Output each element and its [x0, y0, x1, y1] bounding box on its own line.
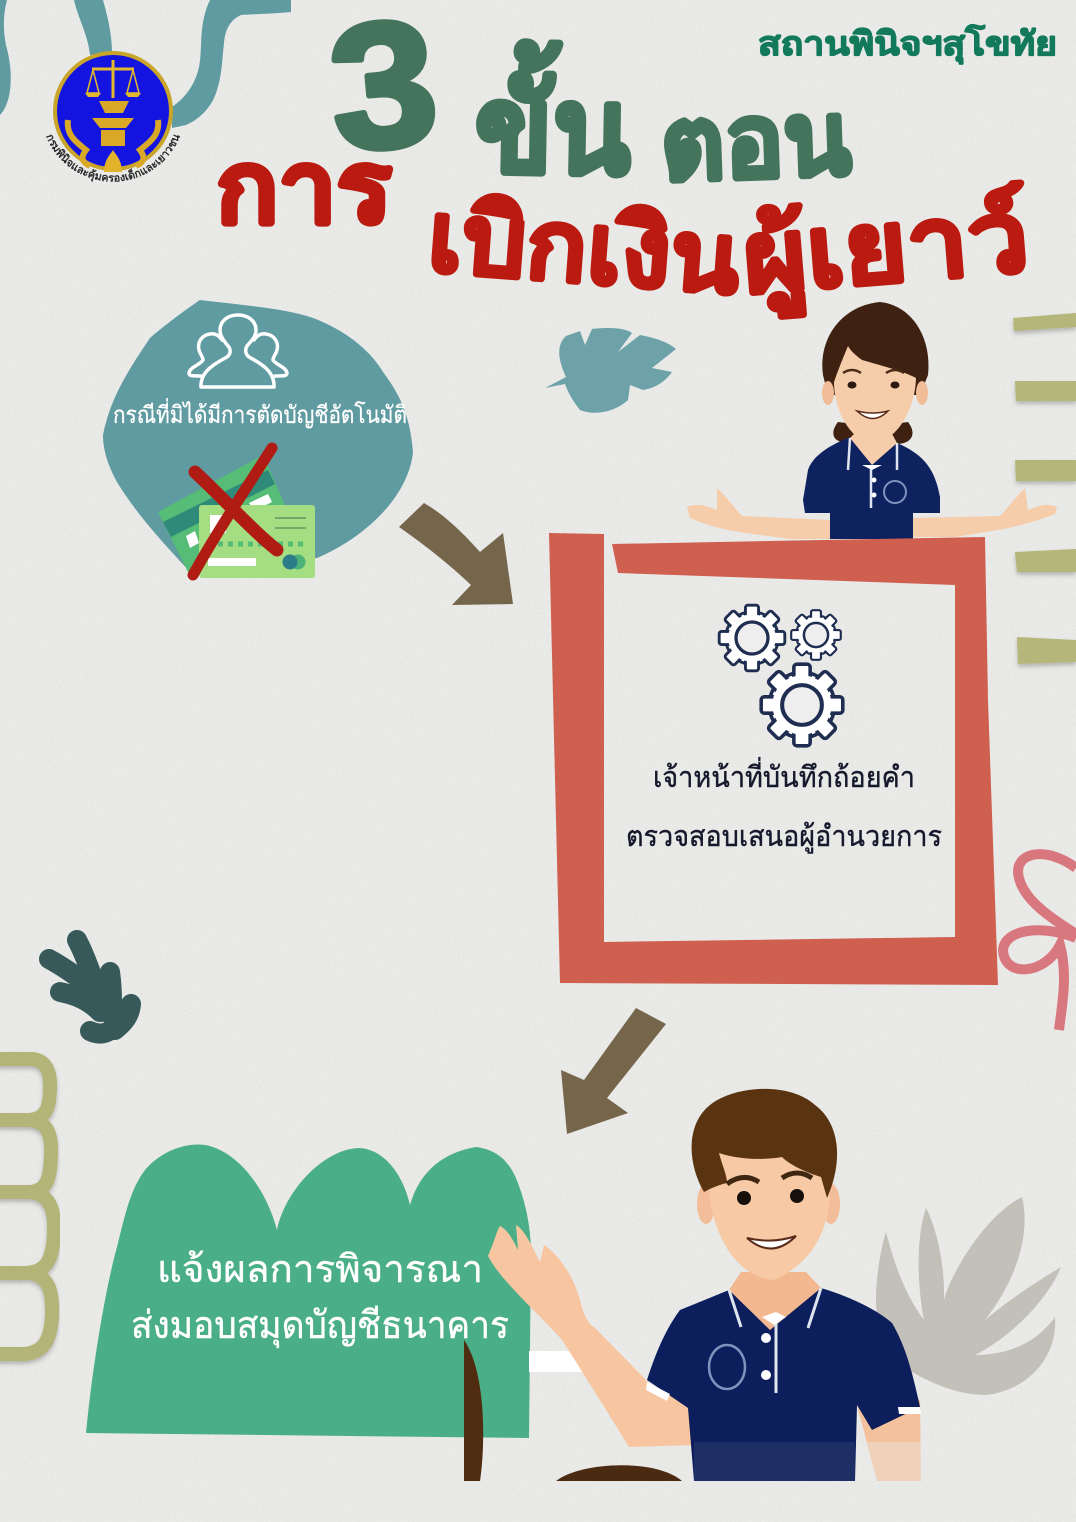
title: red word: การ — [216, 132, 392, 244]
panel: step 2 frame — [549, 533, 998, 985]
step 2 text: ตรวจสอบเสนอผู้อำนวยการ — [626, 821, 942, 854]
step 3 text: แจ้งผลการพิจารณา — [157, 1249, 483, 1291]
decoration: pink ribbon — [1003, 854, 1076, 1030]
title: word steps: ขั้น — [474, 40, 632, 200]
logo — [46, 51, 180, 182]
decoration: top-left teal ribbon — [0, 0, 291, 128]
decoration: olive strips right — [1013, 313, 1076, 664]
leaf: grey plant — [876, 1197, 1061, 1395]
station name: สถานพินิจฯสุโขทัย — [758, 24, 1057, 65]
step 3 text: ส่งมอบสมุดบัญชีธนาคาร — [131, 1305, 509, 1348]
step 1 text: กรณีที่มิได้มีการตัดบัญชีอัตโนมัติ — [113, 398, 407, 429]
panel: step 3 — [86, 1144, 531, 1438]
icon: gears — [719, 605, 843, 746]
title: red phrase part one: เบิกเงิน — [424, 181, 744, 314]
panel: step 1 — [103, 300, 413, 578]
step 2 text — [626, 757, 942, 854]
icon: group of people — [189, 315, 287, 387]
title: word steps second: ตอน — [659, 80, 853, 202]
title — [216, 0, 1033, 321]
step 2 text: เจ้าหน้าที่บันทึกถ้อยคำ — [653, 757, 915, 794]
arrow: step 2 to step 3 — [561, 1008, 666, 1134]
arrow: step 1 to step 2 — [399, 503, 513, 605]
leaf: teal — [545, 328, 676, 413]
title: red phrase part two: ผู้เยาว์ — [739, 180, 1033, 321]
illustration: man — [464, 1089, 922, 1481]
illustration: woman — [687, 302, 1057, 539]
leaf: dark teal — [49, 940, 131, 1034]
logo caption: กรมพินิจและคุ้มครองเด็กและเยาวชน — [46, 134, 180, 182]
step 3 text — [131, 1249, 509, 1348]
decoration: olive loops left — [0, 1059, 54, 1354]
icon: crossed-out bank cards — [158, 448, 315, 578]
